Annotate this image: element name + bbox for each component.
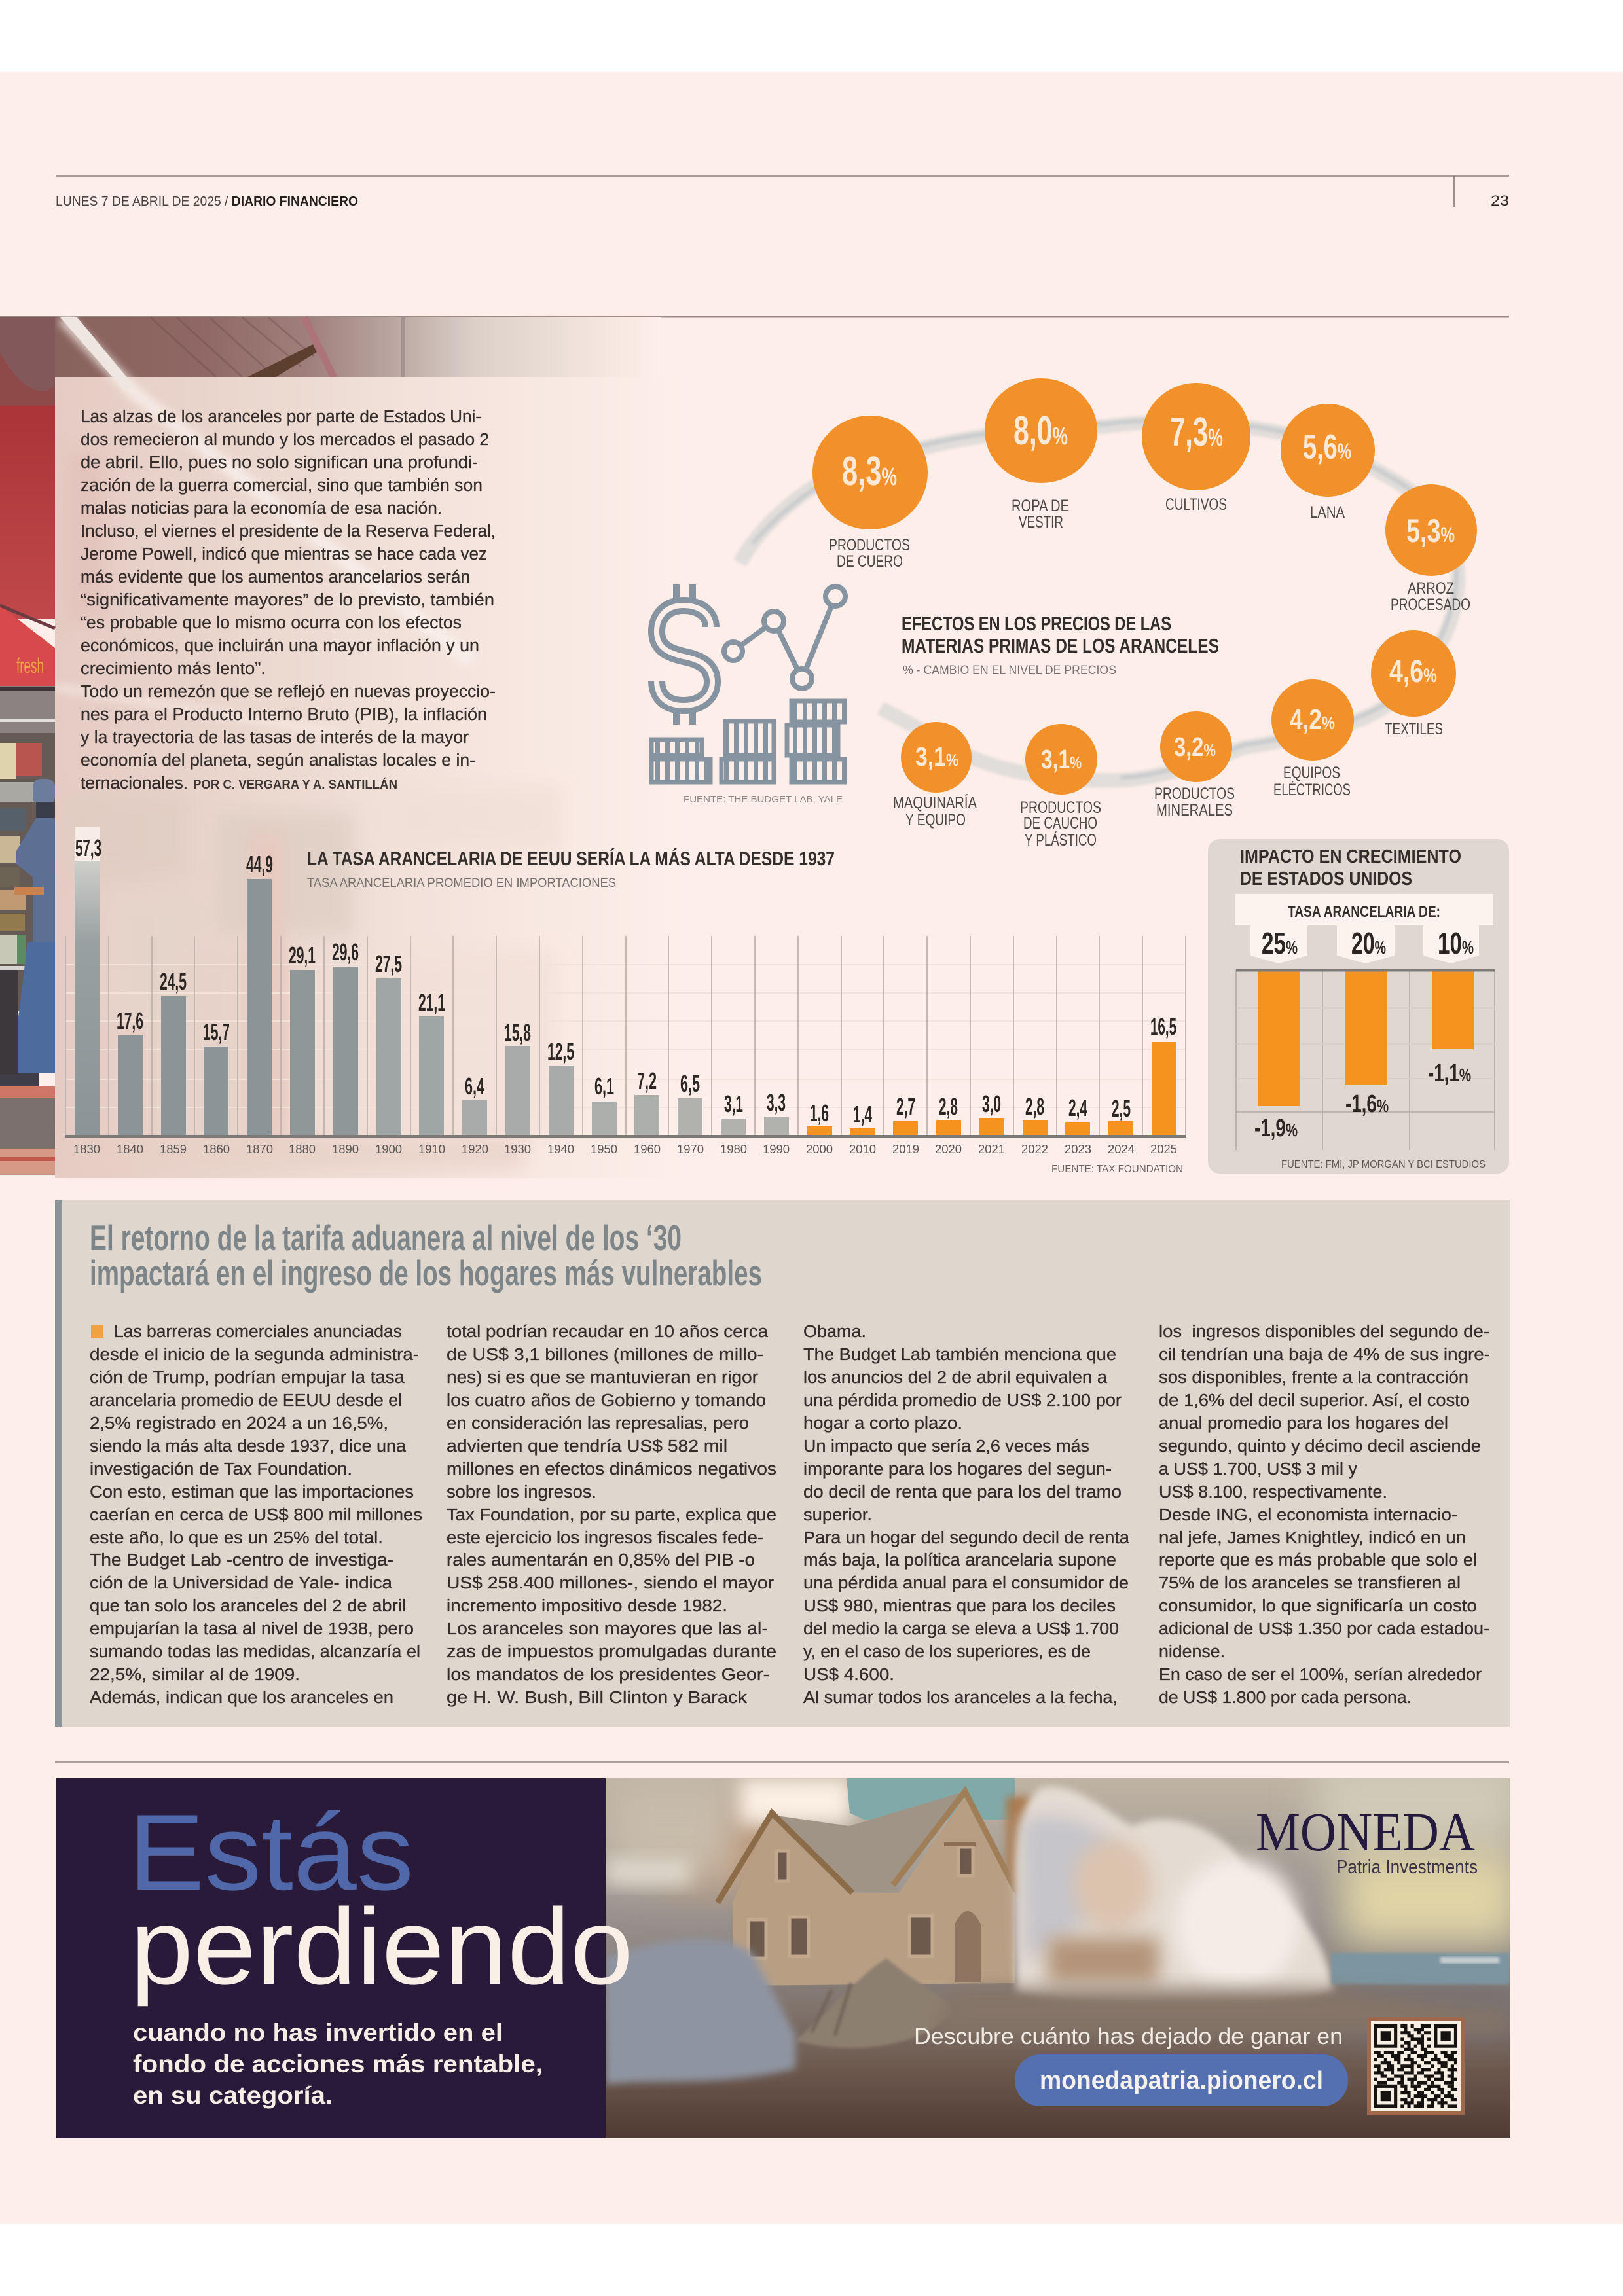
logo: Moneda: MONEDA (1256, 1802, 1475, 1863)
article column 2: zas de impuestos promulgadas durante (447, 1643, 776, 1661)
ad subhead: cuando no has invertido en el (133, 2019, 503, 2046)
article column 2: sobre los ingresos. (447, 1483, 596, 1501)
bar 1990: 3,3 (767, 1089, 786, 1116)
article column 2: total podrían recaudar en 10 años cerca (447, 1323, 769, 1341)
bar 2020 (935, 1093, 962, 1156)
perdiendo overflow onto image is drawn by the headline below: Estás (128, 1792, 414, 1912)
panel: household income article (55, 1200, 1510, 1727)
article column 4 (1159, 1323, 1490, 1707)
bar 1890: 1890 (332, 1142, 359, 1156)
article column 1: ción de la Universidad de Yale- indica (90, 1574, 393, 1592)
article headline: El retorno de la tarifa aduanera al nivel de los ‘30 (90, 1217, 682, 1258)
sea (1332, 1953, 1510, 1984)
ad subhead: fondo de acciones más rentable, (133, 2051, 543, 2077)
source: growth impact: FUENTE: FMI, JP MORGAN Y BCI ESTUDIOS (1281, 1159, 1486, 1170)
house (718, 1791, 1016, 1986)
bubble: cultivos (1142, 383, 1250, 514)
bubble: equipos electricos (1271, 679, 1354, 799)
bubble: productos de caucho y plastico: 3,1% (1041, 744, 1082, 774)
bar 1910: 21,1 (418, 989, 445, 1016)
values: growth impact (1254, 1060, 1471, 1142)
bubble: cultivos: CULTIVOS (1165, 495, 1227, 514)
bar 1880 (289, 942, 316, 1156)
chart: commodity price effects ring (651, 378, 1477, 850)
bar 1880: 29,1 (289, 942, 316, 969)
article column 2 (447, 1323, 776, 1707)
bar 2022 (1021, 1093, 1048, 1156)
bar 1920 (462, 1073, 488, 1156)
bar 2020: 2020 (935, 1142, 962, 1156)
article column 3 (803, 1323, 1130, 1707)
bar 1880: 1880 (289, 1142, 316, 1156)
bubble: productos minerales (1154, 711, 1235, 819)
bullet marker (91, 1325, 103, 1338)
bar 2021 (978, 1090, 1005, 1156)
bar 1950: 1950 (591, 1142, 617, 1156)
panel: intro text: ternacionales. (81, 774, 188, 793)
article column 4: Desde ING, el economista internacio- (1159, 1506, 1457, 1524)
bar 2025 (1150, 1013, 1177, 1156)
bubble: maquinaria y equipo: MAQUINARÍA (893, 793, 977, 812)
article column 2: los cuatro años de Gobierno y tomando (447, 1391, 766, 1410)
bar 2023 (1065, 1094, 1091, 1156)
heading: growth impact: DE ESTADOS UNIDOS (1240, 869, 1412, 889)
panel: intro text: malas noticias para la economía de esa nación. (81, 499, 442, 518)
article column 3: hogar a corto plazo. (803, 1414, 962, 1433)
bubble: arroz procesado (1385, 484, 1477, 614)
ad navy panel (56, 1778, 606, 2138)
tariff header tabs (1235, 894, 1493, 963)
call to action: Descubre cuánto has dejado de ganar en (914, 2024, 1343, 2049)
bubble: equipos electricos: EQUIPOS (1283, 764, 1340, 782)
article column 2: Los aranceles son mayores que las al- (447, 1620, 768, 1638)
heading: price effects: % - CAMBIO EN EL NIVEL DE PRECIOS (903, 664, 1116, 677)
panel: intro text: economía del planeta, según analistas locales e in- (81, 751, 475, 770)
article column 3: los anuncios del 2 de abril equivalen a (803, 1369, 1108, 1387)
bar 2000: 2000 (806, 1142, 833, 1156)
article column 1: investigación de Tax Foundation. (90, 1460, 352, 1479)
bubble: ropa de vestir: ROPA DE (1012, 497, 1069, 515)
bar 1910: 1910 (418, 1142, 445, 1156)
article column 1 (90, 1323, 422, 1707)
article column 1: 2,5% registrado en 2024 a un 16,5%, (90, 1414, 388, 1433)
article column 2: rales aumentarán en 0,85% del PIB -o (447, 1551, 755, 1570)
bubble: ropa de vestir (985, 378, 1097, 531)
washed-out photo patches (65, 452, 563, 1168)
bubble: ropa de vestir: VESTIR (1019, 513, 1063, 531)
article column 4: consumidor, lo que significaría un costo (1159, 1597, 1477, 1615)
article column 1: Con esto, estiman que las importaciones (90, 1483, 414, 1501)
heading: price effects (902, 612, 1219, 677)
bar 2019: 2,7 (896, 1093, 915, 1120)
bar 2010: 1,4 (853, 1101, 872, 1128)
page number: 23 (1491, 192, 1509, 209)
bar 1990 (763, 1089, 790, 1156)
bar 1930: 1930 (504, 1142, 531, 1156)
article column 2: advierten que tendría US$ 582 mil (447, 1437, 727, 1456)
panel: intro text: Incluso, el viernes el presidente de la Reserva Federal, (81, 522, 496, 541)
bar 2023: 2023 (1065, 1142, 1091, 1156)
article column 2: ge H. W. Bush, Bill Clinton y Barack (447, 1689, 747, 1707)
perdiendo overflow onto image is drawn by the headline below (128, 1792, 633, 2007)
article column 3: Un impacto que sería 2,6 veces más (803, 1437, 1089, 1456)
bar 1890: 29,6 (332, 939, 359, 965)
article column 3: una pérdida anual para el consumidor de (803, 1574, 1129, 1592)
bar 1970: 1970 (677, 1142, 704, 1156)
bar 1870: 1870 (246, 1142, 273, 1156)
bar 1950: 6,1 (594, 1073, 614, 1100)
article column 1: The Budget Lab -centro de investiga- (90, 1551, 393, 1570)
bar 1900 (375, 950, 402, 1156)
bar 1900: 27,5 (375, 950, 402, 977)
bar 1980 (720, 1090, 747, 1156)
tariff header tabs: 25% (1262, 926, 1298, 960)
bar 1930 (504, 1019, 531, 1156)
byline: POR C. VERGARA Y A. SANTILLÁN (193, 778, 397, 792)
advertisement: Moneda Patria Investments (56, 1761, 1519, 2138)
bar 1980: 3,1 (724, 1090, 743, 1117)
panel: intro text (81, 408, 496, 793)
bubble: textiles: TEXTILES (1385, 720, 1443, 738)
article column 4: nidense. (1159, 1643, 1225, 1661)
bubble: ropa de vestir: 8,0% (1013, 408, 1068, 454)
bar 1830: 57,3 (75, 834, 101, 861)
bar 1830: 1830 (73, 1142, 100, 1156)
tariff header tabs: 20% (1351, 926, 1386, 960)
bubble: productos de cuero: DE CUERO (837, 552, 903, 571)
bar 1840: 17,6 (117, 1007, 143, 1034)
bubble: productos minerales: PRODUCTOS (1154, 785, 1235, 803)
article column 3: The Budget Lab también menciona que (803, 1346, 1116, 1364)
bar 1900: 1900 (375, 1142, 402, 1156)
logo: Moneda: Patria Investments (1336, 1857, 1478, 1878)
swoosh ring (740, 421, 1458, 780)
article column 4: los ingresos disponibles del segundo de- (1159, 1323, 1489, 1341)
bar 1860 (203, 1018, 230, 1156)
article column 4: nal jefe, James Knightley, indicó en un (1159, 1529, 1466, 1547)
heading: tariff rate: LA TASA ARANCELARIA DE EEUU SERÍA LA MÁS ALTA DESDE 1937 (307, 848, 835, 870)
article column 3: del medio la carga se eleva a US$ 1.700 (803, 1620, 1119, 1638)
heading: tariff rate (307, 848, 835, 890)
bubble: productos de caucho y plastico: PRODUCTOS (1020, 798, 1101, 817)
bubble: maquinaria y equipo: Y EQUIPO (905, 811, 966, 829)
bar 1990: 1990 (763, 1142, 790, 1156)
article column 3: y, en el caso de los superiores, es de (803, 1643, 1091, 1661)
bar 1870: 44,9 (246, 851, 273, 878)
ad subhead (133, 2019, 543, 2109)
bar 1859: 24,5 (160, 968, 187, 995)
bubble: arroz procesado: PROCESADO (1391, 596, 1470, 614)
article column 2: los mandatos de los presidentes Geor- (447, 1666, 769, 1684)
bar 1940: 12,5 (547, 1038, 574, 1065)
article column 1: desde el inicio de la segunda administra- (90, 1346, 419, 1364)
bar 2024 (1108, 1095, 1135, 1156)
panel: intro text: “es probable que lo mismo ocurra con los efectos (81, 614, 462, 632)
url pill: monedapatria.pionero.cl (1040, 2067, 1323, 2094)
values: growth impact: -1,1% (1428, 1060, 1471, 1087)
bar 1970 (677, 1070, 704, 1156)
article headline: impactará en el ingreso de los hogares más vulnerables (90, 1253, 762, 1293)
bar 1920: 6,4 (465, 1073, 484, 1100)
bar 1860: 15,7 (203, 1018, 230, 1045)
article column 3: más baja, la política arancelaria supone (803, 1551, 1116, 1570)
bar 2020: 2,8 (939, 1093, 958, 1120)
article column 2: de US$ 3,1 billones (millones de millo- (447, 1346, 763, 1364)
bar 2000 (806, 1100, 833, 1156)
panel: intro text: “significativamente mayores” de lo previsto, también (81, 591, 494, 609)
bar 1840: 1840 (117, 1142, 143, 1156)
qr code (1367, 2017, 1465, 2115)
heading: price effects: MATERIAS PRIMAS DE LOS ARANCELES (902, 634, 1219, 657)
bar 1950 (591, 1073, 617, 1156)
article column 1: este año, lo que es un 25% del total. (90, 1529, 383, 1547)
bubble: lana (1281, 404, 1375, 522)
bar 2010: 2010 (849, 1142, 876, 1156)
article column 3: Al sumar todos los aranceles a la fecha, (803, 1689, 1118, 1707)
article column 1: caerían en cerca de US$ 800 mil millones (90, 1506, 422, 1524)
article column 2: US$ 258.400 millones-, siendo el mayor (447, 1574, 775, 1592)
bubble: arroz procesado: 5,3% (1406, 512, 1455, 549)
bar 2010 (849, 1101, 876, 1156)
panel: intro text: más evidente que los aumentos arancelarios serán (81, 568, 470, 586)
article column 4: a US$ 1.700, US$ 3 mil y (1159, 1460, 1357, 1479)
article column 4: US$ 8.100, respectivamente. (1159, 1483, 1387, 1501)
values: growth impact: -1,9% (1254, 1115, 1298, 1142)
article column 3: superior. (803, 1506, 872, 1524)
store sign: fresh (16, 654, 44, 677)
bubble: productos de caucho y plastico: Y PLÁSTICO (1025, 831, 1097, 850)
bar 1940: 1940 (547, 1142, 574, 1156)
panel: intro text: crecimiento más lento”. (81, 660, 266, 678)
panel: intro text: nes para el Producto Interno Bruto (PIB), la inflación (81, 706, 487, 724)
bar 1860: 1860 (203, 1142, 230, 1156)
article column 3: imporante para los hogares del segun- (803, 1460, 1112, 1479)
tariff header tabs: 10% (1438, 926, 1474, 960)
foreground sand and fog (606, 1939, 795, 2085)
bubble: cultivos: 7,3% (1170, 410, 1223, 455)
bubble: maquinaria y equipo: 3,1% (915, 742, 958, 772)
article column 1: ción de Trump, podrían empujar la tasa (90, 1369, 405, 1387)
heading: growth impact (1240, 846, 1461, 889)
article column 1: que tan solo los aranceles del 2 de abril (90, 1597, 406, 1615)
bubble: equipos electricos: ELÉCTRICOS (1273, 780, 1351, 799)
chimney (1006, 1797, 1032, 1895)
bubble: productos de cuero (812, 416, 928, 571)
bubble: maquinaria y equipo (893, 722, 977, 829)
ad subhead: en su categoría. (133, 2082, 333, 2109)
bar 1890 (332, 939, 359, 1156)
bar 2021: 2021 (978, 1142, 1005, 1156)
bar 1940 (547, 1038, 574, 1156)
panel: growth impact (1208, 839, 1509, 1174)
bar 2023: 2,4 (1068, 1094, 1087, 1121)
bubble: textiles: 4,6% (1389, 655, 1437, 689)
bar 2025: 2025 (1150, 1142, 1177, 1156)
bar 2021: 3,0 (982, 1090, 1001, 1117)
section rule (0, 316, 1509, 318)
background photo: supermarket (0, 317, 684, 1178)
bar 1920: 1920 (462, 1142, 488, 1156)
bar 1859: 1859 (160, 1142, 187, 1156)
bar 2024: 2024 (1108, 1142, 1135, 1156)
bar 1870 (246, 851, 273, 1156)
article column 3: Obama. (803, 1323, 866, 1341)
article column 1: siendo la más alta desde 1937, dice una (90, 1437, 407, 1456)
bubble: arroz procesado: ARROZ (1408, 579, 1454, 598)
bars: growth impact (1258, 970, 1474, 1106)
article column 4: adicional de US$ 1.350 por cada estadou- (1159, 1620, 1489, 1638)
article column 4: de 1,6% del decil superior. Así, el costo (1159, 1391, 1470, 1410)
article column 2: incremento impositivo desde 1982. (447, 1597, 727, 1615)
bar 1840 (117, 1007, 143, 1156)
bar 1830 (73, 827, 101, 1156)
perdiendo overflow onto image is drawn by the headline below: perdiendo (130, 1886, 633, 2007)
bar 2022: 2022 (1021, 1142, 1048, 1156)
article column 4: de US$ 1.800 por cada persona. (1159, 1689, 1412, 1707)
panel: intro text: Jerome Powell, indicó que mientras se hace cada vez (81, 545, 487, 564)
bubble: productos minerales: MINERALES (1156, 801, 1233, 819)
article column 2: en consideración las represalias, pero (447, 1414, 749, 1433)
article column 1: sumando todas las medidas, alcanzaría el (90, 1643, 420, 1661)
panel: intro text: Todo un remezón que se reflejó en nuevas proyeccio- (81, 683, 496, 701)
article column 3: una pérdida promedio de US$ 2.100 por (803, 1391, 1122, 1410)
bubble: productos minerales: 3,2% (1174, 732, 1216, 762)
url pill (1015, 2054, 1348, 2106)
header date and publication: LUNES 7 DE ABRIL DE 2025 / DIARIO FINANCIERO (56, 194, 358, 209)
article column 4: cil tendrían una baja de 4% de sus ingre- (1159, 1346, 1490, 1364)
article column 1: empujarían la tasa al nivel de 1938, pero (90, 1620, 414, 1638)
bar 1960: 1960 (634, 1142, 661, 1156)
bar 1859 (160, 968, 187, 1156)
bar 1960 (634, 1067, 661, 1156)
bar 1970: 6,5 (680, 1070, 700, 1097)
bar 2019: 2019 (892, 1142, 919, 1156)
bubble: equipos electricos: 4,2% (1290, 704, 1335, 736)
bubble: productos de cuero: 8,3% (842, 449, 897, 494)
panel: intro text: de abril. Ello, pues no solo significan una profundi- (81, 454, 478, 472)
article column 4: 75% de los aranceles se transfieren al (1159, 1574, 1461, 1592)
article column 2: este ejercicio los ingresos fiscales fede- (447, 1529, 763, 1547)
panel: intro text: Las alzas de los aranceles por parte de Estados Uni- (81, 408, 481, 426)
panel: intro text: dos remecieron al mundo y los mercados el pasado 2 (81, 431, 489, 449)
bar 2000: 1,6 (810, 1100, 829, 1126)
bar 2025: 16,5 (1150, 1013, 1176, 1040)
heading: tariff rate: TASA ARANCELARIA PROMEDIO EN IMPORTACIONES (307, 876, 616, 890)
article column 4: anual promedio para los hogares del (1159, 1414, 1448, 1433)
bar 2022: 2,8 (1025, 1093, 1044, 1120)
page header (56, 175, 1509, 209)
article headline (90, 1217, 762, 1293)
article column 1: Además, indican que los aranceles en (90, 1689, 393, 1707)
wave spray (1015, 1787, 1333, 2005)
values: growth impact: -1,6% (1345, 1090, 1389, 1118)
source: tax foundation: FUENTE: TAX FOUNDATION (1051, 1164, 1183, 1175)
chart: historic tariff rate (65, 827, 1186, 1175)
panel: intro text: y la trayectoria de las tasas de interés de la mayor (81, 728, 469, 747)
bubble: lana: 5,6% (1303, 427, 1351, 467)
bar 2019 (892, 1093, 919, 1156)
article column 4: segundo, quinto y décimo decil asciende (1159, 1437, 1481, 1456)
sky and cloud washes (606, 1761, 1519, 2029)
panel: intro text: económicos, que incluirán una mayor inflación y un (81, 637, 479, 655)
article column 3: US$ 4.600. (803, 1666, 894, 1684)
article column 3: Para un hogar del segundo decil de renta (803, 1529, 1130, 1547)
article column 4: reporte que es más probable que solo el (1159, 1551, 1477, 1570)
bubble: productos de cuero: PRODUCTOS (829, 536, 910, 554)
article column 3: do decil de renta que para los del tramo (803, 1483, 1122, 1501)
article column 1: arancelaria promedio de EEUU desde el (90, 1391, 402, 1410)
article column 4: sos disponibles, frente a la contracción (1159, 1369, 1468, 1387)
article column 3: US$ 980, mientras que para los deciles (803, 1597, 1116, 1615)
bar 1980: 1980 (720, 1142, 747, 1156)
bar 1960: 7,2 (637, 1067, 657, 1094)
panel: intro text: zación de la guerra comercial, sino que también son (81, 476, 483, 495)
bar 1930: 15,8 (504, 1019, 531, 1046)
heading: growth impact: IMPACTO EN CRECIMIENTO (1240, 846, 1461, 867)
bubble: productos de caucho y plastico (1020, 724, 1101, 850)
ad divider rule (55, 1761, 1509, 1763)
ad image: house and wave (606, 1761, 1519, 2138)
article column 2: Tax Foundation, por su parte, explica que (447, 1506, 776, 1524)
tariff header tabs: TASA ARANCELARIA DE: (1288, 903, 1440, 921)
article column 1: Las barreras comerciales anunciadas (114, 1323, 402, 1341)
article column 1: 22,5%, similar al de 1909. (90, 1666, 300, 1684)
shopper (0, 779, 55, 1086)
article column 2: nes) si es que se mantuvieran en rigor (447, 1369, 759, 1387)
icon: dollar sign, line chart and containers (651, 584, 845, 782)
bar 2024: 2,5 (1112, 1095, 1131, 1122)
bubble: textiles (1371, 630, 1456, 738)
heading: price effects: EFECTOS EN LOS PRECIOS DE LAS (902, 612, 1171, 635)
source: budget lab: FUENTE: THE BUDGET LAB, YALE (684, 794, 843, 805)
bar 1910 (418, 989, 445, 1156)
article column 2: millones en efectos dinámicos negativos (447, 1460, 776, 1479)
bubble: lana: LANA (1310, 503, 1345, 522)
article column 4: En caso de ser el 100%, serían alrededor (1159, 1666, 1482, 1684)
bubble: productos de caucho y plastico: DE CAUCHO (1023, 814, 1097, 833)
